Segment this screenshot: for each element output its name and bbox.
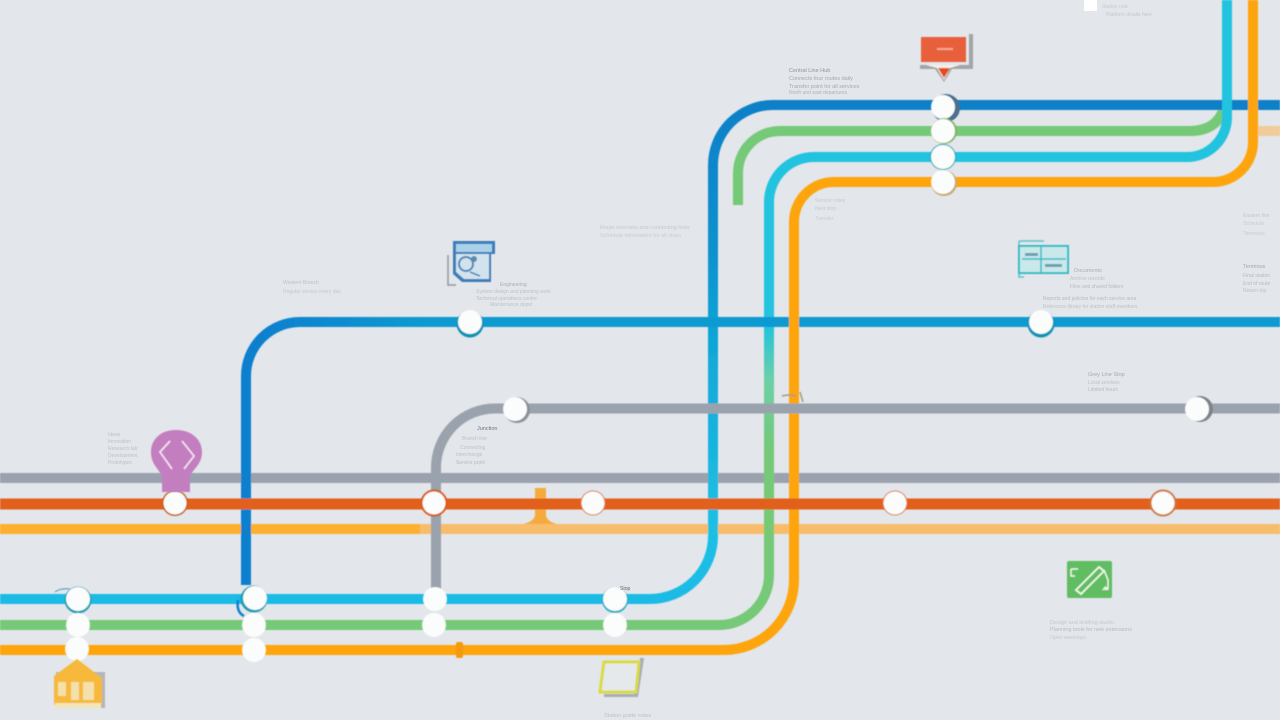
label: right note lower: Terminus — [1243, 264, 1266, 270]
icon: purple lightbulb with code brackets — [151, 430, 202, 492]
line: red-orange horizontal — [0, 498, 1280, 510]
label: curve note line 3: Transfer — [815, 216, 834, 222]
station group: gray branch — [503, 396, 1213, 423]
station group: red-orange line — [162, 490, 1176, 516]
label: gray branch heading: Junction — [477, 426, 498, 432]
label: lightbulb note: Ideas — [108, 432, 121, 438]
label: lightbulb note line 5: Prototypes — [108, 460, 132, 466]
station group: lower fourth interchange — [602, 587, 628, 637]
label: square icon note: Station guide notes — [604, 713, 651, 719]
label: gray branch note line 4: Service point — [456, 460, 486, 466]
icon: yellow square frame — [600, 658, 644, 697]
line: light orange lower horizontal — [0, 524, 420, 534]
icon: yellow house — [54, 659, 105, 708]
white marker at top — [1084, 0, 1097, 11]
label: gray line note line 2: Local services — [1088, 380, 1120, 386]
icon: orange sign marker — [920, 34, 973, 82]
station group: lower second interchange — [240, 586, 268, 662]
label: folder icon note line 3: Files and shared folders — [1070, 284, 1124, 290]
label: gray line note: Grey Line Stop — [1088, 372, 1125, 378]
label: lightbulb note line 4: Development — [108, 453, 138, 459]
label: top corner note line 2: Platform details here — [1106, 12, 1152, 18]
label: top interchange line 4: North and east departures — [789, 90, 848, 96]
label: folder icon note line 5: Reference library for station staff members — [1043, 304, 1138, 310]
label: right note lower line 3: End of route — [1243, 281, 1270, 287]
label: left note line 2: Regular service every day — [283, 289, 341, 295]
line: pale orange lower horizontal — [420, 524, 1280, 534]
label: right note lower line 4: Return trip — [1243, 288, 1267, 294]
label: left note: Western Branch — [283, 280, 319, 286]
label: folder icon note line 2: Archive records — [1070, 276, 1105, 282]
label: right note upper line 3: Timetable — [1243, 231, 1265, 237]
line: gray branch route — [436, 408, 1280, 590]
label: gear icon note line 3: Technical operations centre — [476, 296, 537, 302]
label: lightbulb note line 2: Innovation — [108, 439, 131, 445]
small teal tag — [55, 589, 70, 592]
small orange tick — [456, 642, 463, 658]
icon: blue gear document — [448, 241, 495, 285]
station group: lower third interchange — [422, 587, 447, 637]
icon: green pencil tool — [1067, 561, 1112, 598]
station group: blue middle line — [456, 310, 1054, 338]
label: gray line note line 3: Limited hours — [1088, 387, 1119, 393]
label: folder icon note: Documents — [1074, 268, 1102, 274]
label: top interchange line 2: Connects four routes daily — [789, 76, 853, 82]
line: blue middle route — [246, 322, 1280, 585]
label: gear icon note line 4: Maintenance depot — [490, 302, 533, 308]
stations — [64, 94, 1213, 662]
label: curve note line 2: Next stop — [815, 206, 836, 212]
label: center note: Route overview and connecting lines — [600, 225, 690, 231]
label: top corner note: Station note — [1102, 4, 1129, 10]
label: gray branch note line 2: Connecting — [460, 445, 486, 451]
label: gear icon note: Engineering — [500, 282, 527, 288]
line: blue top route joining cyan lower route — [0, 105, 1280, 599]
label: curve note: Service notes — [815, 198, 846, 204]
small gray tick — [782, 392, 803, 402]
label: gray branch note line 3: Interchange — [456, 452, 483, 458]
label: folder icon note line 4: Reports and policies for each service area — [1043, 296, 1137, 302]
small blue curl — [238, 600, 244, 616]
label: lower cyan tag: Stop — [620, 586, 631, 592]
line: green upper route — [738, 108, 1224, 205]
label: top interchange line 3: Transfer point for all services — [789, 84, 860, 90]
label: gear icon note line 2: System design and planning work — [476, 289, 551, 295]
label: center note line 2: Schedule information for all stops — [600, 233, 682, 239]
label: right note upper line 2: Schedule — [1243, 221, 1264, 227]
line: gray long horizontal — [0, 473, 1280, 483]
label: right note lower line 2: Final station — [1243, 273, 1270, 279]
label: pencil note: Design and drafting studio — [1050, 620, 1114, 626]
label: pencil note line 3: Open weekdays — [1050, 635, 1086, 641]
label: top interchange: Central Line Hub — [789, 68, 830, 74]
line: orange branch stub — [523, 488, 557, 524]
station group: top interchange — [930, 94, 960, 196]
label: pencil note line 2: Planning tools for new extensions — [1050, 627, 1132, 633]
label: lightbulb note line 3: Research lab — [108, 446, 138, 452]
label: gray branch note: Branch line — [462, 436, 487, 442]
label: right note upper: Eastern line — [1243, 213, 1270, 219]
icon: teal folder — [1019, 241, 1068, 277]
station group: lower left interchange — [64, 586, 92, 661]
line: pale orange right stub — [1258, 126, 1280, 136]
